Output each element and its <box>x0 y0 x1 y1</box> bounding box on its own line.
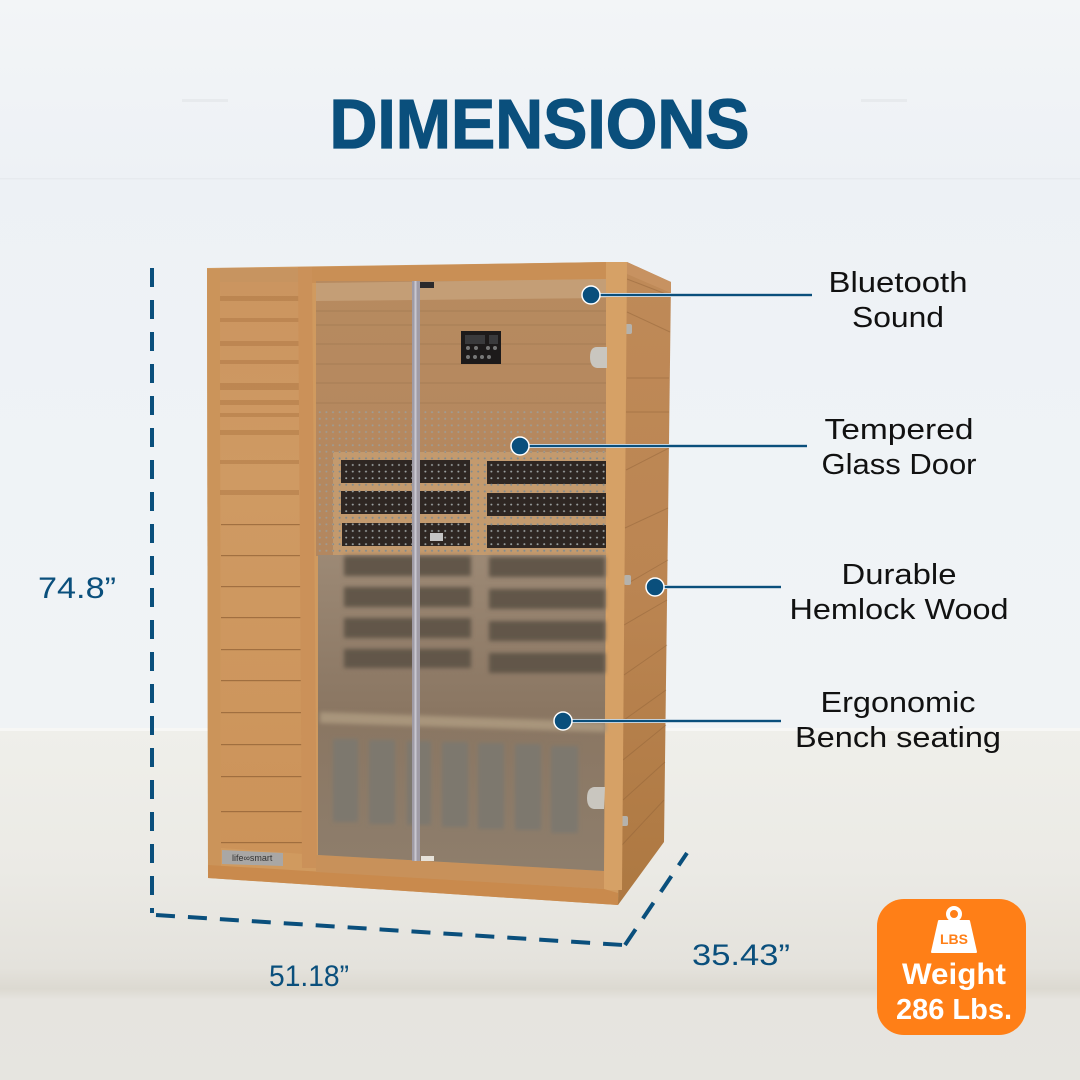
left pillar <box>207 269 221 866</box>
callout: bluetooth sound: Bluetooth <box>828 267 968 299</box>
ceiling <box>316 279 606 301</box>
callout: bluetooth sound <box>582 267 968 334</box>
right pillar <box>604 262 627 890</box>
callout: durable hemlock wood <box>646 559 1008 626</box>
callout: ergonomic bench seating <box>554 687 1001 754</box>
callout: tempered glass door: Glass Door <box>822 449 977 481</box>
control panel <box>461 331 501 364</box>
dimension: depth: 35.43” <box>692 939 790 972</box>
callout: ergonomic bench seating: Bench seating <box>795 722 1001 754</box>
weight badge <box>877 899 1026 1035</box>
glass door seam <box>412 281 420 861</box>
weight badge: Weight <box>902 958 1006 991</box>
center pillar <box>298 267 317 868</box>
callout: durable hemlock wood: Hemlock Wood <box>790 594 1008 626</box>
perforated glass dots <box>318 410 606 555</box>
left slatted panel <box>220 282 303 854</box>
title: DIMENSIONS <box>330 85 750 163</box>
top rail <box>312 262 608 283</box>
icon: weight <box>932 908 976 952</box>
brand badge <box>222 850 283 866</box>
icon: weight: LBS <box>940 931 968 947</box>
callout: tempered glass door: Tempered <box>824 414 974 446</box>
dimension: width: 51.18” <box>269 960 349 993</box>
heater panels <box>333 452 606 559</box>
sauna cabinet <box>207 262 671 905</box>
brand badge: life∞smart <box>232 853 273 863</box>
front frame <box>207 262 627 905</box>
door hinges <box>587 347 607 809</box>
callout: ergonomic bench seating: Ergonomic <box>820 687 976 719</box>
callout: bluetooth sound: Sound <box>852 302 944 334</box>
callout: durable hemlock wood: Durable <box>842 559 956 591</box>
side wall <box>618 262 671 905</box>
dimension: height: 74.8” <box>38 572 116 605</box>
dimension lines <box>152 268 687 945</box>
base <box>208 865 618 905</box>
weight badge: 286 Lbs. <box>896 994 1012 1026</box>
callout: tempered glass door <box>511 414 977 481</box>
interior back wall <box>316 281 606 556</box>
frosted lower glass <box>318 555 606 871</box>
